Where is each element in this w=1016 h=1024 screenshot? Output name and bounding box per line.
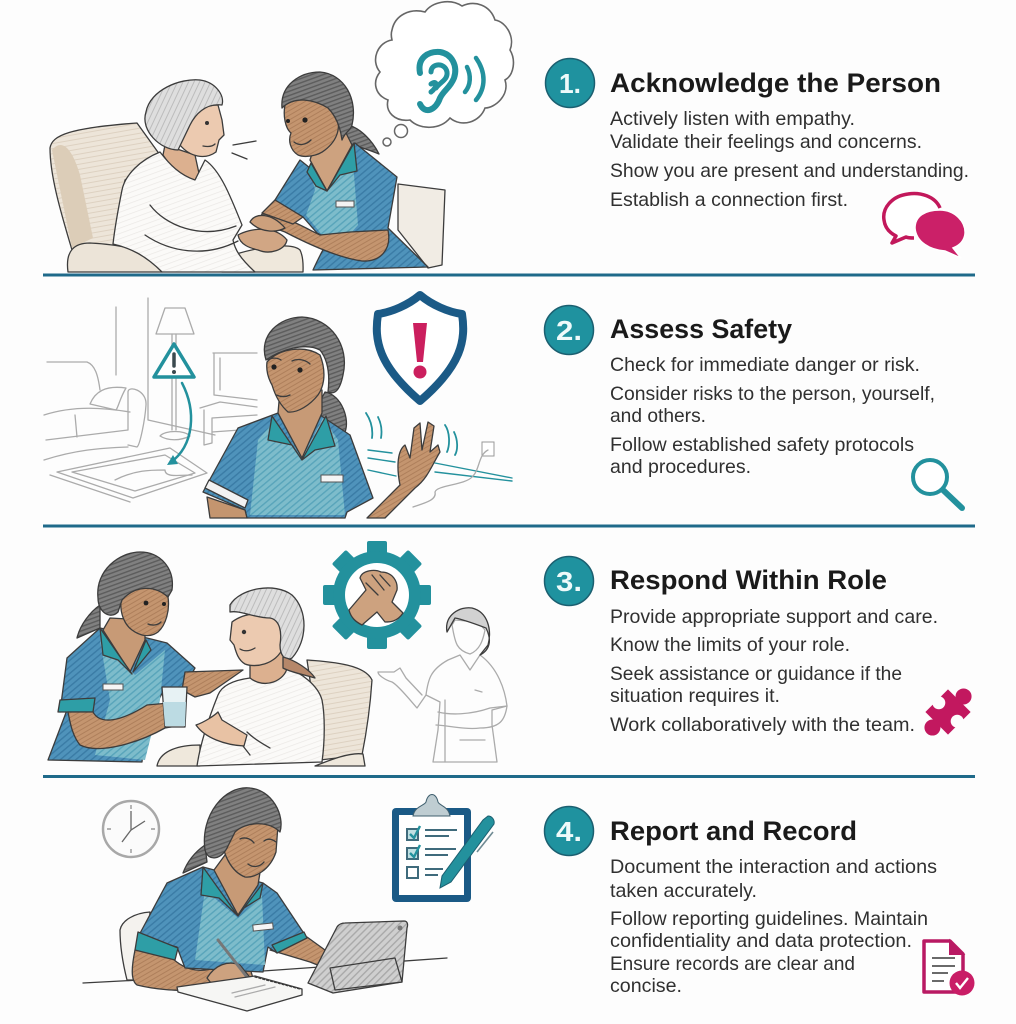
icon: gear with clasped hands <box>323 541 431 649</box>
panel: step 2 illustration <box>44 295 512 518</box>
icon: magnifier <box>913 460 962 508</box>
divider 2 <box>43 524 975 528</box>
thought bubble: ear <box>376 2 513 146</box>
icon: wall clock <box>103 801 159 857</box>
icon: clipboard with pen <box>392 794 494 902</box>
body text 3: situation requires it. <box>610 685 780 707</box>
step number badge 3 <box>544 556 594 606</box>
body text 2: and procedures. <box>610 456 751 478</box>
body text 4: taken accurately. <box>610 880 757 902</box>
body text 4: Ensure records are clear and <box>610 953 855 975</box>
step number badge 4 <box>544 806 594 856</box>
heading 4: Report and Record <box>610 816 857 846</box>
armchair <box>50 123 445 272</box>
armchair <box>157 660 372 766</box>
divider 1 <box>43 274 975 276</box>
body text 3: Know the limits of your role. <box>610 634 850 656</box>
elderly woman <box>196 588 324 766</box>
elderly woman <box>113 80 256 272</box>
body text 1 <box>610 108 969 211</box>
panel: step 1 illustration <box>50 2 513 272</box>
icon: speech bubbles <box>884 194 965 258</box>
body text 4: Document the interaction and actions <box>610 856 937 878</box>
body text 4: concise. <box>610 975 682 997</box>
step number badge 1: 1. <box>559 68 581 99</box>
step number badge 4: 4. <box>556 816 582 847</box>
body text 1: Show you are present and understanding. <box>610 160 969 182</box>
heading 3: Respond Within Role <box>610 565 887 595</box>
panel: step 2 text <box>544 306 962 508</box>
panel: step 3 illustration <box>48 541 507 766</box>
step number badge 1 <box>546 58 594 108</box>
body text 2: Consider risks to the person, yourself, <box>610 383 935 405</box>
cable and socket <box>368 442 512 507</box>
panel: step 4 illustration <box>83 788 494 1011</box>
heading 2: Assess Safety <box>610 314 792 344</box>
step number badge 2 <box>544 306 594 354</box>
body text 2: Check for immediate danger or risk. <box>610 354 920 376</box>
body text 1: Establish a connection first. <box>610 189 848 211</box>
body text 4: confidentiality and data protection. <box>610 930 912 952</box>
body text 4 <box>610 856 937 997</box>
nurse with glass <box>48 552 315 762</box>
body text 1: Actively listen with empathy. <box>610 108 855 130</box>
step number badge 2: 2. <box>556 315 582 346</box>
warning triangle with arrow <box>154 344 194 465</box>
living room sketch <box>44 298 257 502</box>
icon: puzzle piece <box>913 677 983 747</box>
colleague sketch <box>378 608 507 762</box>
icon: safety shield <box>377 295 463 401</box>
nurse writing <box>120 788 325 992</box>
tablet <box>308 921 408 993</box>
nurse <box>238 72 428 270</box>
body text 3 <box>610 606 938 736</box>
body text 1: Validate their feelings and concerns. <box>610 131 922 153</box>
divider 3 <box>43 775 975 778</box>
heading 1: Acknowledge the Person <box>610 68 941 98</box>
body text 2: Follow established safety protocols <box>610 434 914 456</box>
body text 4: Follow reporting guidelines. Maintain <box>610 908 928 930</box>
panel: step 3 text <box>544 556 983 747</box>
panel: step 1 text <box>546 58 969 258</box>
nurse raising hand <box>203 317 457 518</box>
body text 3: Work collaboratively with the team. <box>610 714 915 736</box>
body text 2 <box>610 354 935 478</box>
step number badge 3: 3. <box>556 566 582 597</box>
body text 3: Seek assistance or guidance if the <box>610 663 902 685</box>
icon: document with check <box>924 941 974 996</box>
body text 2: and others. <box>610 405 706 427</box>
desk line <box>83 958 447 983</box>
body text 3: Provide appropriate support and care. <box>610 606 938 628</box>
notebook <box>177 976 302 1011</box>
panel: step 4 text <box>544 806 974 997</box>
